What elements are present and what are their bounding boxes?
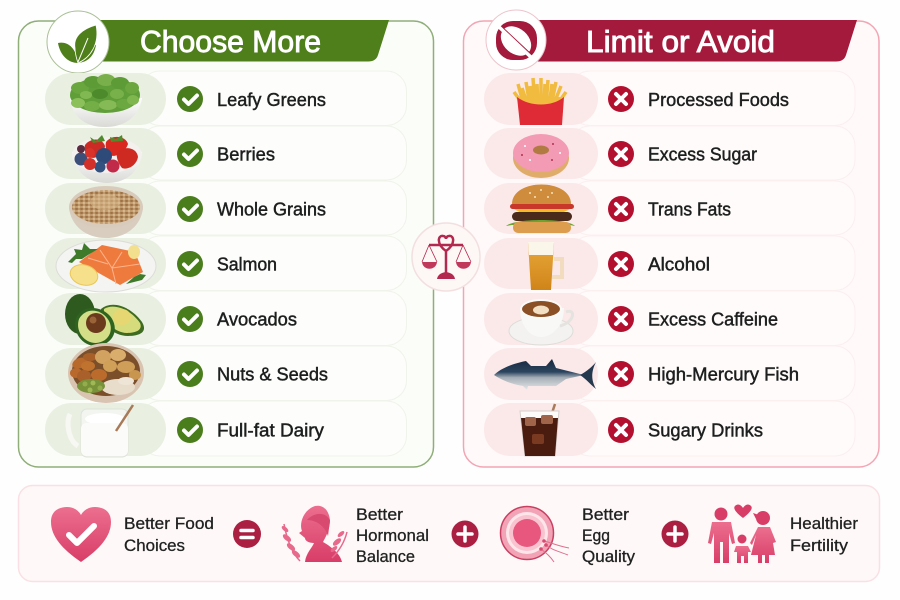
- icon: grains bowl: [69, 186, 143, 238]
- text: better hormonal balance: Balance: [356, 548, 415, 566]
- row: Salmon: [45, 236, 406, 292]
- icon: leafy greens bowl: [70, 74, 142, 127]
- text: better food choices: Better Food: [124, 515, 214, 533]
- row: Processed Foods: [484, 71, 855, 126]
- operator: equals: [233, 520, 261, 548]
- icon: donut: [513, 134, 569, 178]
- icon: no-food badge: [486, 10, 546, 70]
- row: Alcohol: [484, 236, 855, 290]
- icon: cross: [608, 251, 634, 277]
- label: Berries: [217, 144, 275, 164]
- label: Whole Grains: [217, 200, 326, 220]
- icon: beer glass: [528, 242, 562, 290]
- icon: check: [177, 251, 203, 277]
- icon: check: [177, 306, 203, 332]
- text: better egg quality: Better: [582, 506, 630, 524]
- icon: check: [177, 196, 203, 222]
- icon: egg cell: [500, 506, 569, 562]
- text: better egg quality: Quality: [582, 548, 636, 566]
- label: Leafy Greens: [217, 90, 326, 110]
- row: Berries: [45, 126, 406, 183]
- heading banner: Limit or Avoid: Limit or Avoid: [586, 24, 775, 59]
- row: High-Mercury Fish: [484, 346, 855, 400]
- icon: leaf badge: [47, 11, 109, 73]
- icon: avocados: [65, 294, 144, 346]
- text: healthier fertility: Fertility: [790, 537, 849, 555]
- icon: fries: [514, 78, 566, 125]
- text: better egg quality: Egg: [582, 527, 610, 545]
- label: Salmon: [217, 254, 277, 274]
- row: Trans Fats: [484, 181, 855, 235]
- icon: cross: [608, 141, 634, 167]
- icon: burger: [506, 184, 575, 233]
- row: Excess Sugar: [484, 126, 855, 180]
- heading banner: Limit or Avoid: [530, 20, 857, 62]
- icon: balance scale badge: [412, 223, 480, 291]
- operator: plus: [452, 520, 478, 548]
- icon: cross: [608, 361, 634, 387]
- panel: limit or avoid: [464, 10, 879, 467]
- icon: dairy jar: [68, 405, 133, 457]
- row: Nuts & Seeds: [45, 343, 406, 403]
- text: healthier fertility: Healthier: [790, 515, 859, 533]
- row: Sugary Drinks: [484, 401, 855, 456]
- icon: check: [177, 417, 203, 443]
- operator: plus: [662, 520, 688, 548]
- label: Excess Caffeine: [648, 310, 778, 330]
- icon: tuna fish: [494, 359, 596, 390]
- text: better food choices: Choices: [124, 537, 185, 555]
- label: Avocados: [217, 310, 297, 330]
- text: better hormonal balance: Hormonal: [356, 527, 429, 545]
- icon: check: [177, 361, 203, 387]
- label: Trans Fats: [648, 200, 731, 220]
- panel: equation footer: [18, 486, 880, 582]
- icon: cross: [608, 306, 634, 332]
- label: Alcohol: [648, 254, 710, 274]
- icon: nuts bowl: [68, 343, 144, 403]
- label: Sugary Drinks: [648, 420, 763, 440]
- label: High-Mercury Fish: [648, 364, 799, 384]
- row: Avocados: [45, 291, 406, 346]
- label: Full-fat Dairy: [217, 420, 324, 440]
- icon: cross: [608, 86, 634, 112]
- heading banner: Choose More: Choose More: [140, 24, 321, 59]
- icon: coffee cup: [509, 299, 573, 345]
- icon: heart with check: [51, 507, 111, 562]
- row: Leafy Greens: [45, 71, 406, 127]
- icon: cross: [608, 417, 634, 443]
- icon: woman profile with laurels: [281, 506, 347, 562]
- row: Excess Caffeine: [484, 291, 855, 346]
- icon: salmon plate: [56, 240, 156, 292]
- label: Excess Sugar: [648, 144, 757, 164]
- icon: cola glass: [520, 404, 559, 456]
- icon: check: [177, 86, 203, 112]
- icon: berries bowl: [72, 135, 142, 183]
- icon: cross: [608, 196, 634, 222]
- panel: choose more: [18, 11, 434, 467]
- icon: family with heart: [708, 505, 776, 563]
- heading banner: Choose More: [95, 20, 389, 62]
- text: better hormonal balance: Better: [356, 506, 404, 524]
- label: Processed Foods: [648, 90, 789, 110]
- label: Nuts & Seeds: [217, 364, 328, 384]
- row: Whole Grains: [45, 181, 406, 238]
- row: Full-fat Dairy: [45, 401, 406, 457]
- icon: check: [177, 141, 203, 167]
